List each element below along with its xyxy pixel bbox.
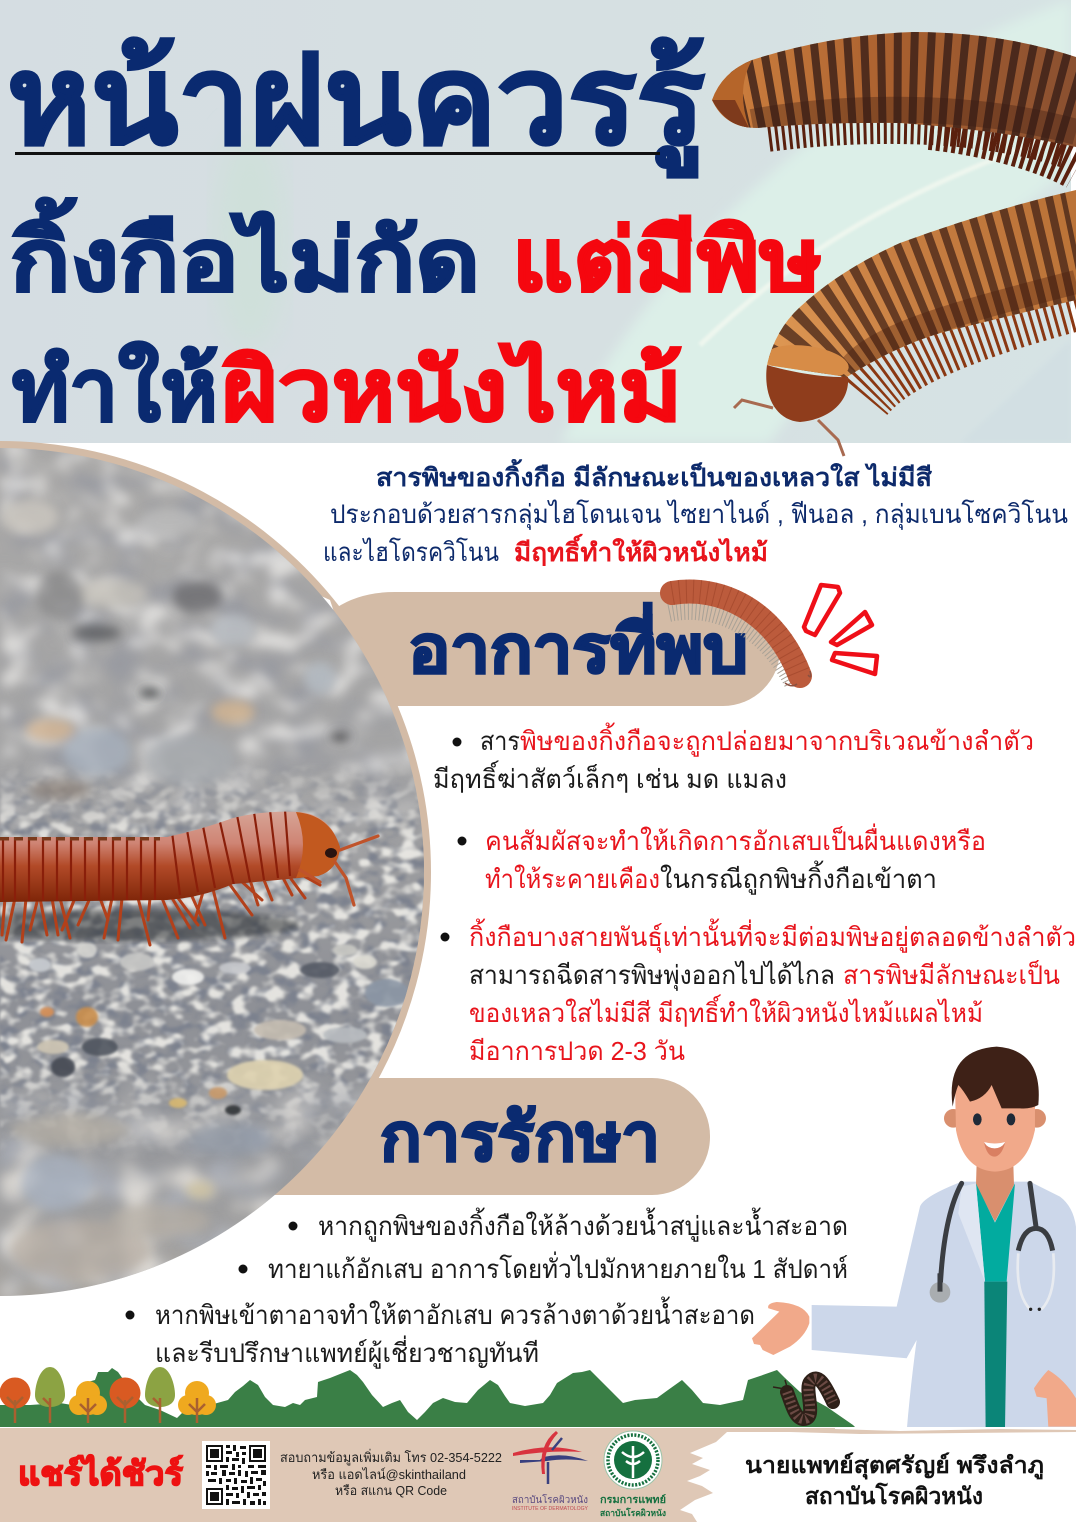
doctor credit: นายแพทย์สุตศรัญย์ พรึงลำภู [745,1452,1044,1480]
treatment list: หากพิษเข้าตาอาจทำให้ตาอักเสบ ควรล้างตาด้วยน้ำสะอาด [155,1296,755,1330]
footer contact text [280,1449,502,1498]
ears [944,1109,963,1128]
icon: cartoon millipede on pill [668,592,811,686]
doctor credit [745,1452,1044,1509]
title: ทำให้ [12,342,218,439]
hands [752,1302,809,1355]
green hills [0,1368,855,1427]
bullet 1: สาร [480,726,520,756]
intro text: มีฤทธิ์ทำให้ผิวหนังไหม้ [514,533,768,567]
bullet 3 [440,918,1076,1066]
logo: department of medical services: กรมการแพทย์ [600,1494,666,1506]
bullet 3: มีอาการปวด 2-3 วัน [469,1036,685,1066]
footer contact text: หรือ สแกน QR Code [335,1483,447,1498]
logo: institute of dermatology: สถาบันโรคผิวหนัง [512,1493,588,1506]
sharp stones middle [29,942,409,1115]
millipede in photo [0,810,378,945]
bullet 1 [433,722,1034,794]
bullet 2: ในกรณีถูกพิษกิ้งกือเข้าตา [660,860,937,895]
treatment list: หากถูกพิษของกิ้งกือให้ล้างด้วยน้ำสบู่และน้ำสะอาด [318,1207,848,1242]
treatment list: ทายาแก้อักเสบ อาการโดยทั่วไปมักหายภายใน 1 สัปดาห์ [268,1251,848,1284]
logo: institute of dermatology: INSTITUTE OF DERMATOLOGY [512,1506,589,1512]
title: หน้าฝนควรรู้ [7,32,705,177]
bullet 1: พิษของกิ้งกือจะถูกปล่อยมาจากบริเวณข้างลำตัว [520,722,1034,757]
hair [952,1047,1039,1109]
sharp gravel, middle [0,760,430,1160]
intro text: สารพิษของกิ้งกือ มีลักษณะเป็นของเหลวใส ไม่มีสี [376,458,933,492]
treatment list [126,1207,848,1369]
header background: leaf photo [0,0,1071,443]
bullet 2: คนสัมผัสจะทำให้เกิดการอักเสบเป็นผื่นแดงหรือ [485,823,986,856]
bullet 3: สามารถฉีดสารพิษพุ่งออกไปได้ไกล [469,960,835,991]
heading pill: treatment: การรักษา [380,1100,660,1174]
eyes [973,1113,982,1125]
footer slogan: แชร์ได้ชัวร์ [18,1454,183,1492]
lapel shading [958,1183,985,1282]
doctor credit: สถาบันโรคผิวหนัง [805,1482,983,1509]
bullet 3: สารพิษมีลักษณะเป็น [843,959,1060,990]
blurred gravel, bottom [0,1080,364,1296]
neck [976,1163,1014,1222]
heading pill: symptoms: อาการที่พบ [408,602,748,686]
trees row [0,1367,216,1423]
icon: small coiled millipede [773,1379,833,1419]
logo: department of medical services: สถาบันโรคผิวหนัง [600,1507,666,1518]
blurred stones top [2,499,350,800]
title [7,32,822,439]
title: ผิวหนังไหม้ [222,341,682,439]
bullet 3: ของเหลวใสไม่มีสี มีฤทธิ์ทำให้ผิวหนังไหม้แผลไหม้ [469,994,983,1028]
icon: QR code [202,1441,270,1509]
bullet 2: ทำให้ระคายเคือง [485,864,660,894]
footer panel [0,1427,1076,1522]
photo circle: millipede on gravel [0,440,431,1310]
millipede lower in header [734,190,1076,456]
bullet 1: มีฤทธิ์ฆ่าสัตว์เล็กๆ เช่น มด แมลง [433,760,787,794]
symptoms list [433,722,1076,1066]
icon: red emphasis marks [804,585,877,674]
face [955,1083,1035,1172]
logo: department of medical services [600,1431,666,1518]
title: แต่มีพิษ [512,213,822,309]
logo: institute of dermatology [512,1431,589,1512]
intro text: และไฮโดรควิโนน [323,537,499,567]
coat [812,1182,1076,1432]
blurred stones bottom [10,1114,270,1280]
scrubs [976,1183,1015,1282]
treatment list: และรีบปรึกษาแพทย์ผู้เชี่ยวชาญทันที [155,1335,539,1369]
bullet 2 [458,823,986,895]
footer contact text: สอบถามข้อมูลเพิ่มเติม โทร 02-354-5222 [280,1449,502,1466]
title: กิ้งกือไม่กัด [10,197,480,309]
stethoscope [940,1183,962,1292]
footer contact text: หรือ แอดไลน์@skinthailand [312,1467,466,1482]
doctor illustration [752,1047,1076,1432]
heading pill: symptoms [300,592,780,706]
blurred gravel, top [0,448,419,837]
heading pill: treatment [180,1078,710,1195]
intro text [323,458,1068,567]
mouth [984,1142,1005,1157]
millipede upper in header [712,32,1076,170]
